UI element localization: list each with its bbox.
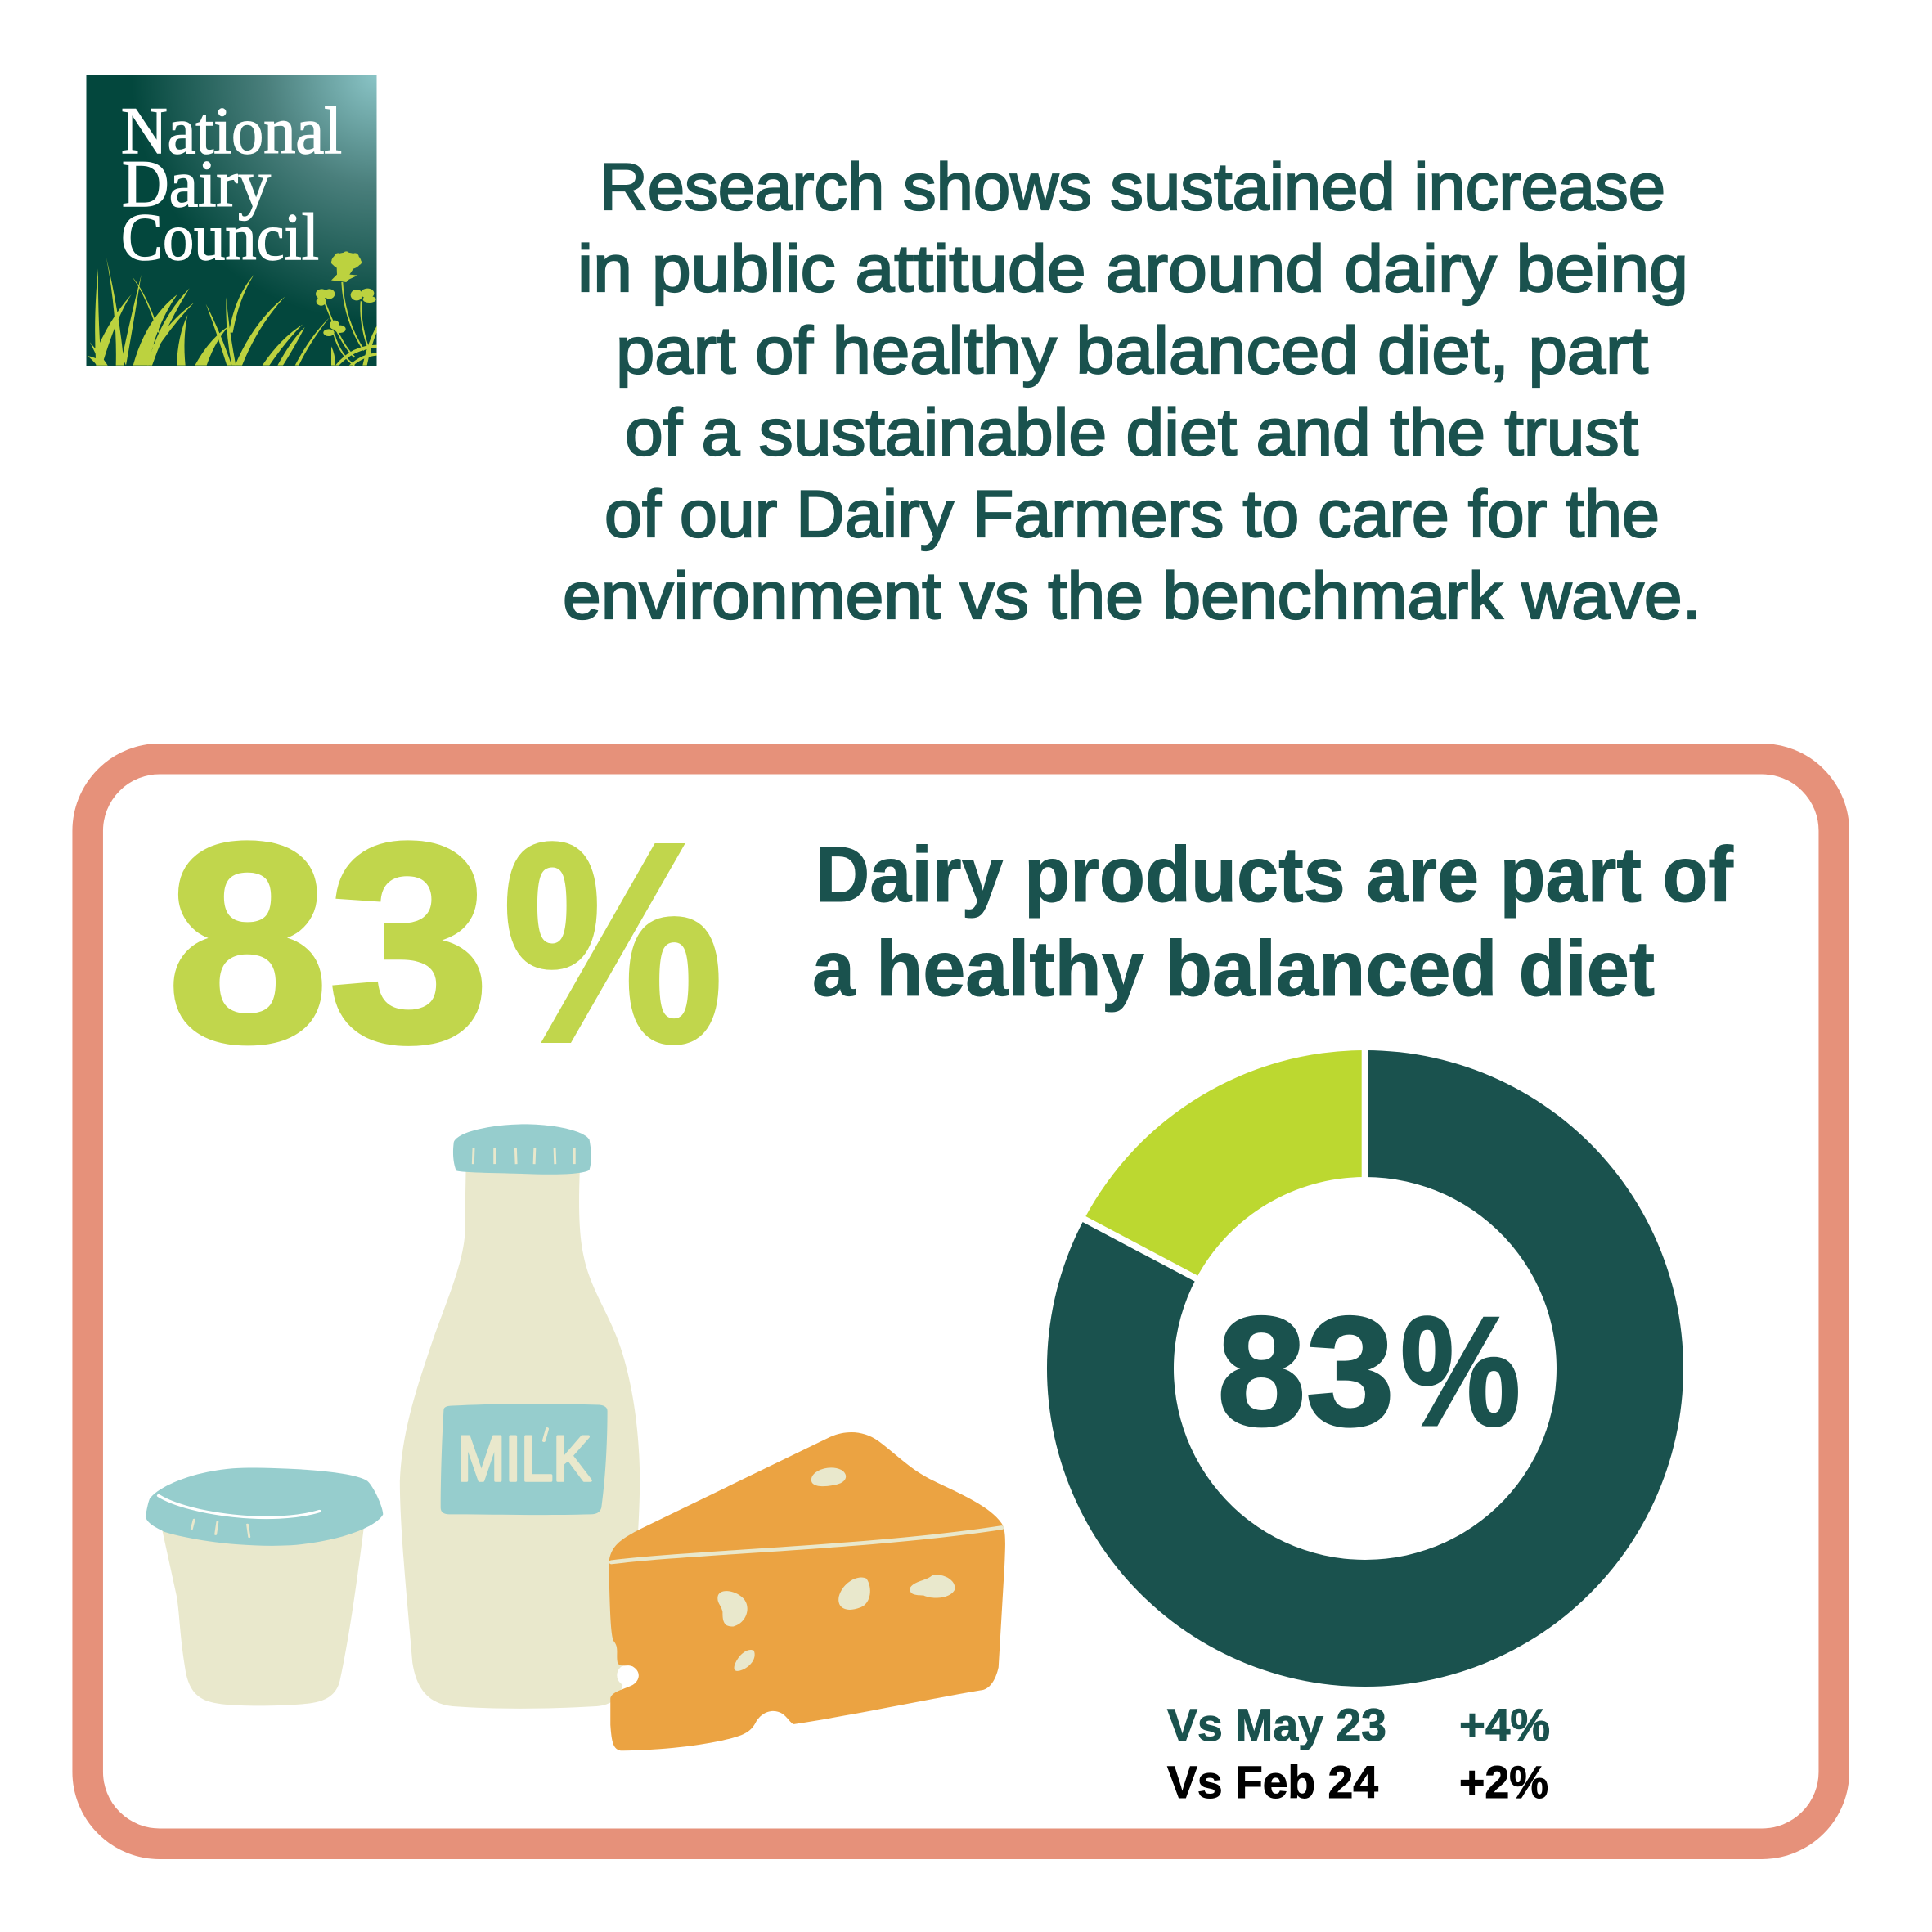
donut chart: 83% [1047,1043,1683,1687]
panel: statistic card [88,759,1834,1844]
donut centre value: 83 [1217,1285,1395,1458]
donut centre value [1217,1285,1521,1458]
comparison: vs May 23: +4% [1459,1699,1550,1750]
heading: dairy products statement [812,831,1734,1013]
big statistic: 83%: % [503,785,723,1101]
logo wordmark: Council [121,200,319,274]
donut centre value: % [1400,1285,1521,1458]
intro text block: part of healthy balanced diet, part [616,314,1648,388]
comparison: vs May 23: Vs May 23 [1167,1699,1386,1750]
logo wordmark: Dairy [122,146,271,221]
icon: cheese wedge [609,1432,1005,1750]
intro text block: of our Dairy Farmers to care for the [604,478,1660,551]
intro text block [563,151,1701,633]
icon: milk bottle [400,1124,640,1709]
logo wordmark [121,93,342,274]
heading: dairy products statement: Dairy products are part of [815,831,1734,919]
label text: MILK: MILK [457,1422,591,1494]
icon: yoghurt pot [146,1467,383,1705]
icon: grass and clover [88,251,377,366]
big statistic: 83% [167,785,723,1101]
logo: National Dairy Council [87,75,377,366]
intro text block: in public attitude around dairy being [577,232,1688,306]
intro text block: of a sustainable diet and the trust [625,396,1638,470]
comparison: vs Feb 24: +2% [1459,1756,1548,1808]
comparison: vs May 23 [1167,1699,1550,1750]
intro text block: environment vs the benchmark wave. [563,559,1701,633]
comparison: vs Feb 24 [1167,1756,1548,1808]
big statistic: 83%: 83 [167,785,490,1101]
intro text block: Research shows sustained increase [600,151,1665,224]
heading: dairy products statement: a healthy balanced diet [812,925,1655,1013]
logo wordmark: National [121,93,342,168]
comparison: vs Feb 24: Vs Feb 24 [1167,1756,1378,1808]
